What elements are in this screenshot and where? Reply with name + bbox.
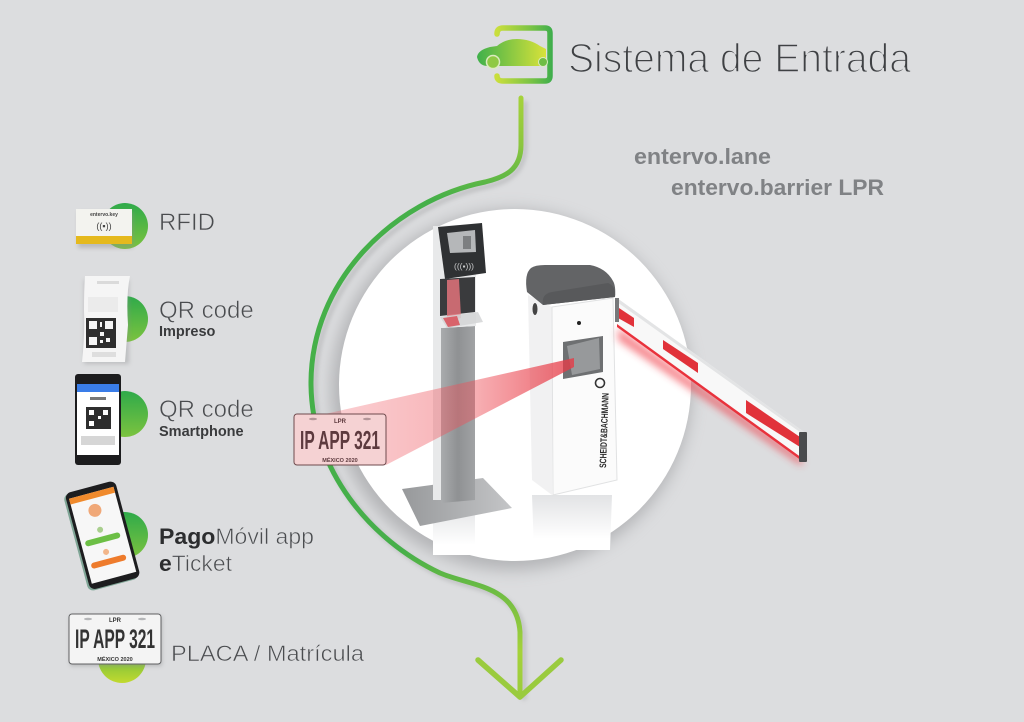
label: PagoMóvil app eTicket: eTicket (159, 551, 233, 576)
brand label: SCHEIDT&BACHMANN (598, 393, 612, 468)
icon: RFID card: ((▪)) (96, 221, 112, 231)
floor reflections (433, 495, 612, 555)
label: PagoMóvil app eTicket: PagoMóvil app (159, 524, 314, 549)
label: PLACA / Matrícula: PLACA / Matrícula (171, 641, 365, 666)
label: QR code Impreso: QR code (159, 297, 254, 324)
text: product names: entervo.lane (634, 144, 771, 169)
icon: RFID card (76, 209, 133, 248)
icon: license plate in beam: MÉXICO 2020 (322, 456, 358, 464)
beam: LPR red light (325, 358, 574, 465)
icon: license plate in beam: LPR (334, 419, 347, 425)
label: QR code Smartphone: Smartphone (159, 424, 244, 440)
icon: car entry logo (477, 28, 550, 81)
label: PagoMóvil app eTicket (159, 524, 314, 576)
list: green dot badges (98, 203, 148, 683)
icon: license plate: IP APP 321 (75, 624, 155, 654)
icon: license plate in beam: IP APP 321 (300, 425, 380, 455)
icon: license plate: MÉXICO 2020 (97, 655, 133, 663)
icon: license plate: LPR (109, 618, 122, 624)
label: QR code Smartphone (159, 396, 254, 440)
text: product names (634, 144, 884, 200)
icon: printed QR ticket (82, 276, 130, 364)
icon: entervo.lane pedestal (402, 223, 512, 526)
heading: Sistema de Entrada: Sistema de Entrada (568, 35, 911, 81)
arrow: entry flow line (311, 98, 561, 697)
arrow: flow line shadow (315, 101, 525, 700)
label: QR code Smartphone: QR code (159, 396, 254, 423)
icon: barrier arm (615, 298, 807, 466)
label: RFID: RFID (159, 209, 215, 236)
icon: PagoMóvil phone (63, 480, 141, 592)
label: QR code Impreso (159, 297, 254, 340)
icon: license plate in beam (294, 414, 386, 465)
panel: white circle shadow (331, 210, 691, 570)
icon: RFID card: entervo.key (90, 212, 118, 218)
panel: white equipment circle (325, 209, 691, 561)
icon: entervo.lane pedestal: (((▪))) (454, 262, 474, 271)
text: product names: entervo.barrier LPR (671, 175, 884, 200)
icon: barrier cabinet (526, 265, 617, 495)
icon: smartphone QR (75, 374, 121, 465)
label: QR code Impreso: Impreso (159, 324, 216, 340)
icon: license plate (69, 614, 162, 666)
